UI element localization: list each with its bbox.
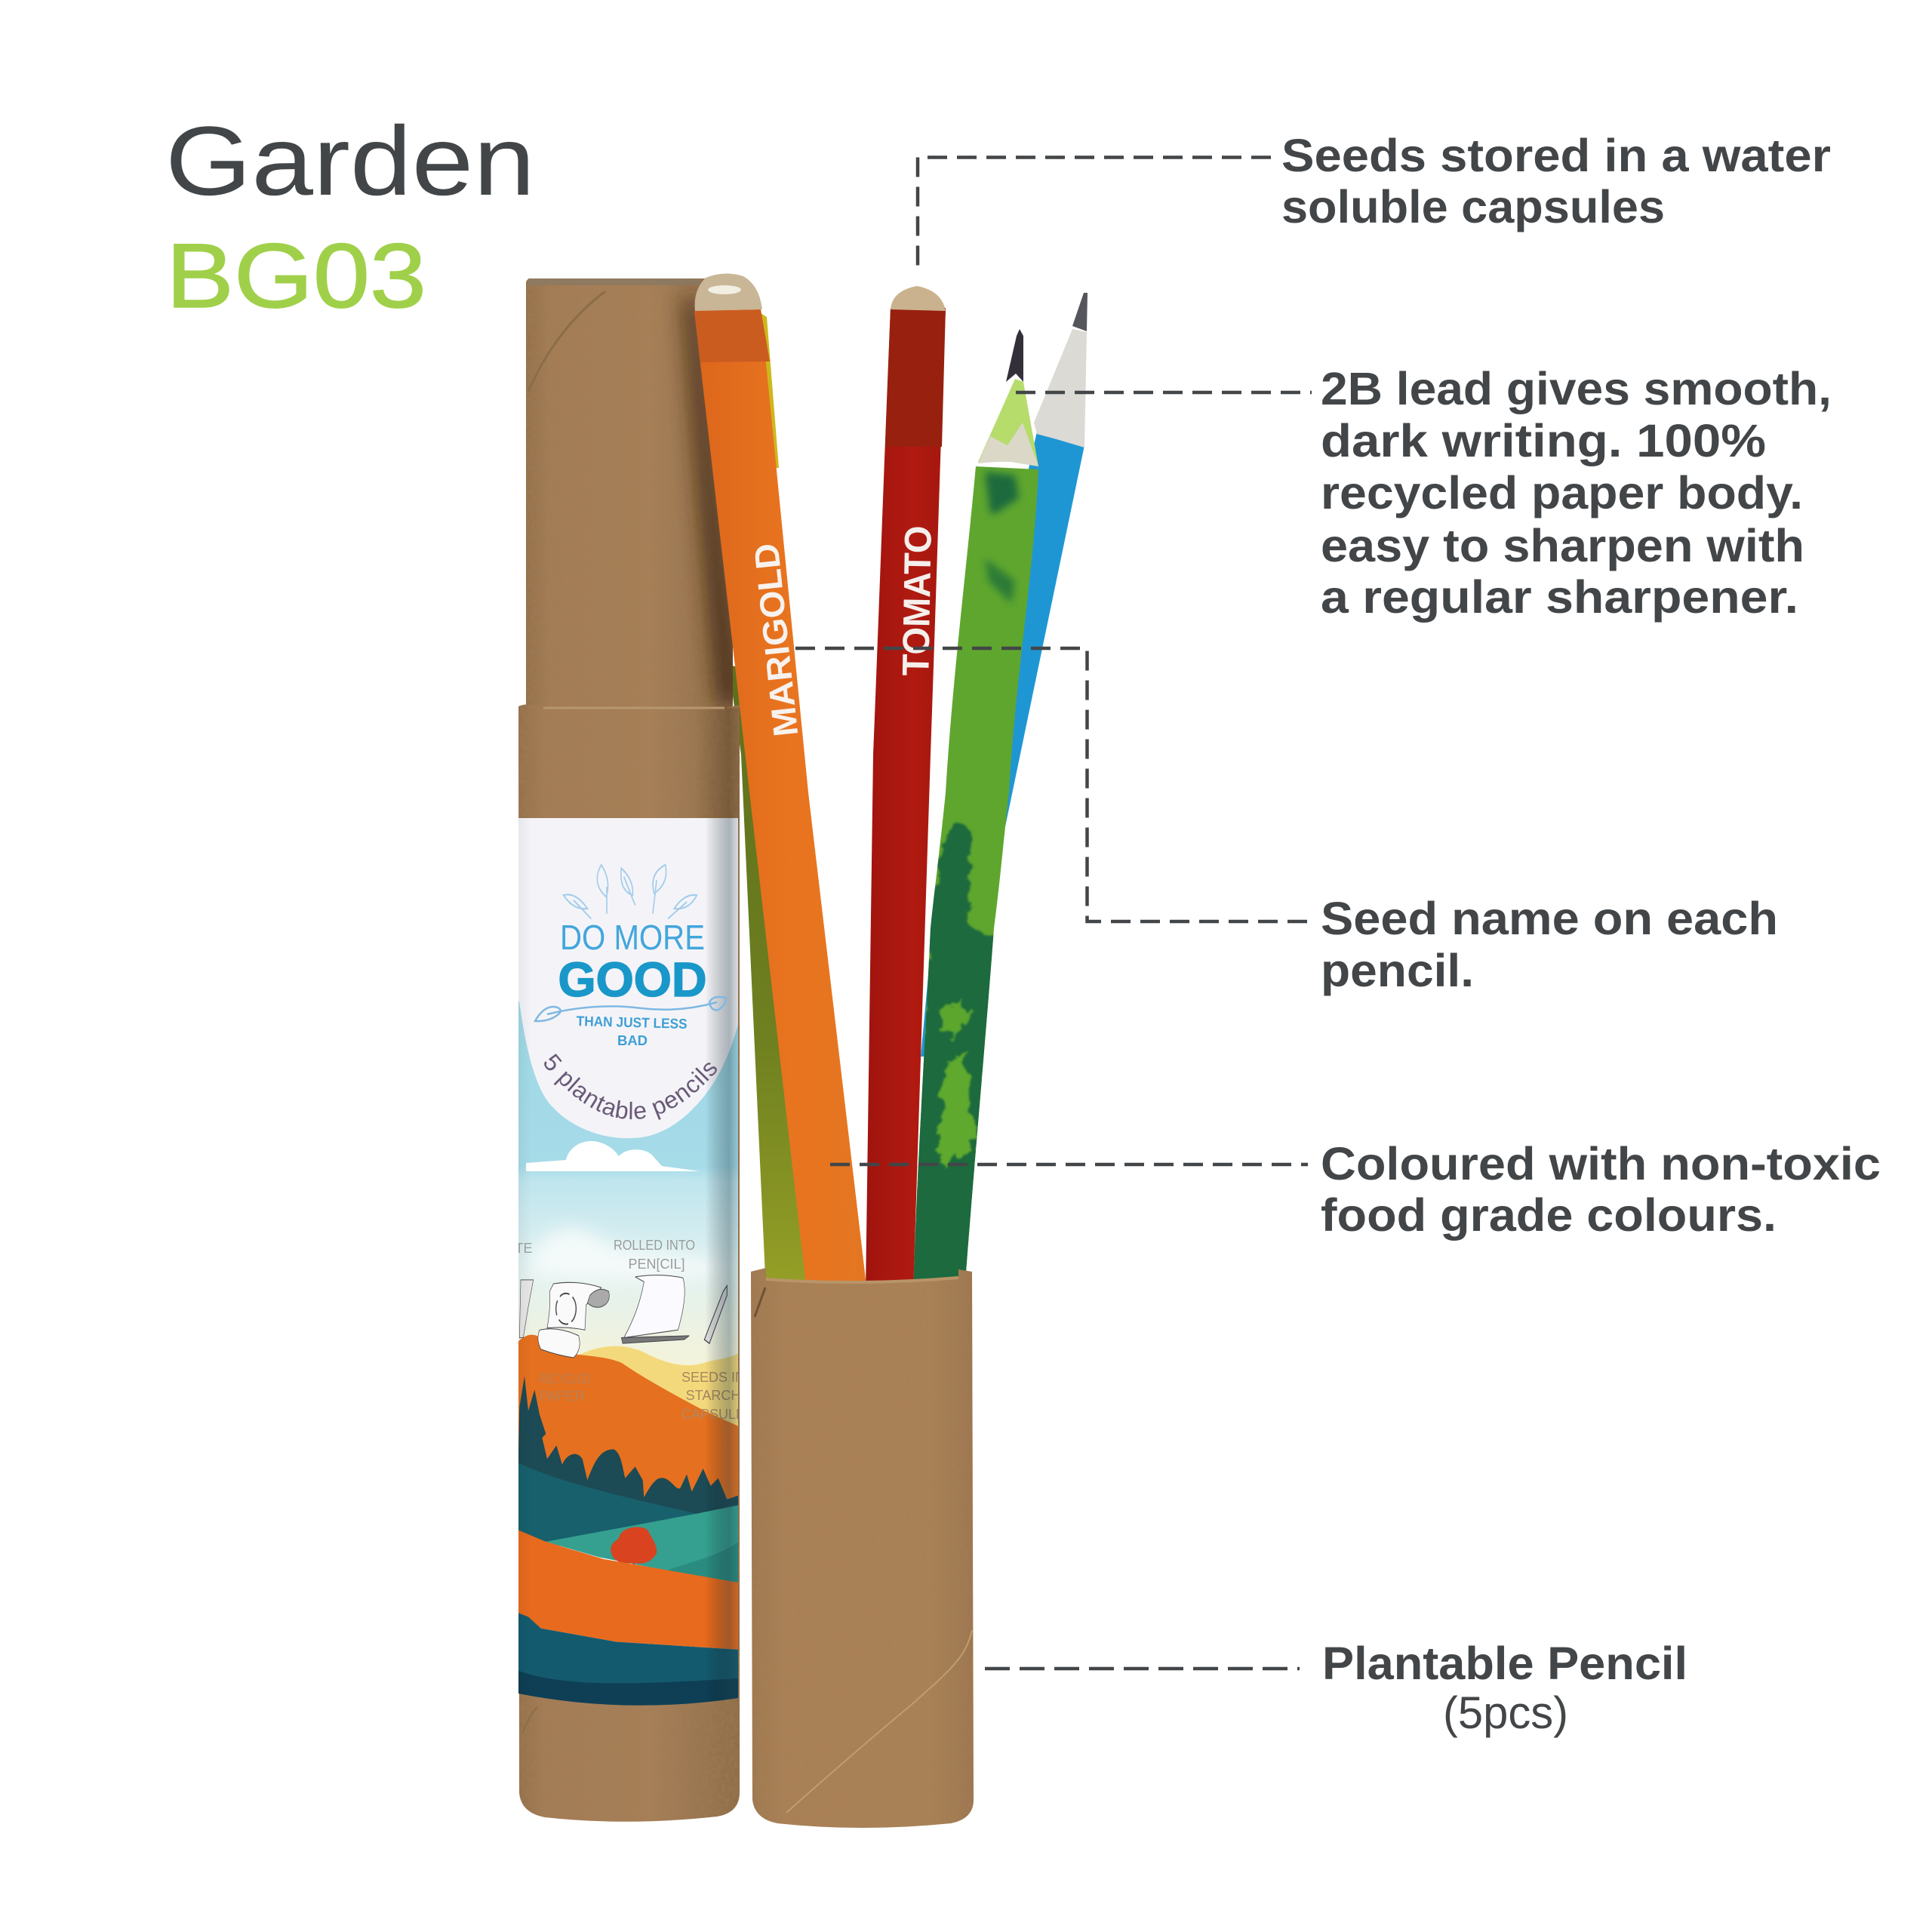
- storage tube: upper inner part: [526, 278, 743, 709]
- orange marigold pencil: [694, 273, 867, 1292]
- pencil pot tube: [751, 1268, 974, 1828]
- label text: process captions: CAPSULE: [681, 1407, 745, 1422]
- leader: 2B lead: [1016, 391, 1312, 394]
- callout: seed name: Seed name on each: [1321, 893, 1778, 944]
- label logo: DO MORE: DO MORE: [560, 918, 705, 957]
- storage tube: sleeve with label: [518, 704, 740, 1822]
- label text: process captions: ROLLED INTO: [614, 1238, 695, 1253]
- label logo: leaves: [564, 865, 697, 918]
- callout: seeds stored: Seeds stored in a water: [1281, 130, 1831, 181]
- callout: 2B lead: a regular sharpener.: [1321, 571, 1798, 623]
- label text: process captions: SEEDS IN: [681, 1370, 745, 1385]
- callout: 2B lead: 2B lead gives smooth,: [1321, 363, 1832, 414]
- label logo: tagline: THAN JUST LESS: [576, 1013, 688, 1032]
- pencil text: MARIGOLD: MARIGOLD: [746, 541, 805, 739]
- callout: 2B lead: [1321, 363, 1832, 623]
- label artwork: [515, 817, 745, 1716]
- callout: plantable pencil: Plantable Pencil: [1322, 1638, 1687, 1689]
- product code: BG03: BG03: [166, 224, 426, 327]
- label text: process captions: [515, 1238, 745, 1422]
- label text: process captions: TE: [515, 1241, 533, 1256]
- callout: seed name: [1321, 893, 1778, 996]
- callout: colours: Coloured with non-toxic: [1321, 1138, 1881, 1189]
- callout: colours: [1321, 1138, 1881, 1241]
- callout: seed name: pencil.: [1321, 945, 1474, 996]
- leader: seeds capsule: [918, 157, 1271, 273]
- callout: plantable pencil: [1322, 1638, 1687, 1738]
- leader: seed name: [795, 648, 1308, 921]
- callout: 2B lead: recycled paper body.: [1321, 467, 1803, 518]
- callout: 2B lead: easy to sharpen with: [1321, 520, 1804, 571]
- callout: seeds stored: [1281, 130, 1831, 232]
- olive pencil: [728, 313, 809, 1292]
- title: Garden: Garden: [165, 106, 535, 216]
- label logo: leafy flourish: [535, 997, 726, 1021]
- pencil text: TOMATO: TOMATO: [894, 525, 940, 676]
- icon: recycled paper roll: [538, 1282, 609, 1358]
- clouds: [526, 1141, 736, 1281]
- blue pencil: [921, 293, 1088, 1057]
- icon: pencil: [704, 1286, 727, 1343]
- label text: process captions: RECYCLED: [539, 1371, 590, 1386]
- callout: colours: food grade colours.: [1321, 1189, 1777, 1241]
- callout: plantable pencil: (5pcs): [1443, 1687, 1568, 1738]
- label text: process captions: STARCH: [686, 1388, 740, 1403]
- icon: partial left drawing: [519, 1280, 534, 1337]
- landscape: [518, 1275, 738, 1713]
- red tomato pencil: [866, 286, 946, 1292]
- callout: 2B lead: dark writing. 100%: [1321, 415, 1766, 466]
- icon: paper scroll: [621, 1275, 689, 1343]
- leader: food colours: [830, 1163, 1308, 1166]
- label logo: GOOD: GOOD: [558, 952, 706, 1007]
- white badge shape: [518, 817, 739, 1138]
- leader: plantable pencil: [985, 1667, 1300, 1670]
- label logo: tagline: BAD: [617, 1032, 648, 1048]
- callout: seeds stored: soluble capsules: [1281, 181, 1665, 232]
- label text: process captions: PAPER: [540, 1389, 585, 1404]
- label: 5 plantable pencils: 5 plantable pencils: [544, 1054, 717, 1120]
- sky: [518, 989, 738, 1358]
- label logo: tagline: [576, 1013, 688, 1048]
- shading: [518, 818, 738, 1716]
- label text: process captions: PEN[CIL]: [628, 1257, 685, 1272]
- green pencil: [906, 329, 1038, 1298]
